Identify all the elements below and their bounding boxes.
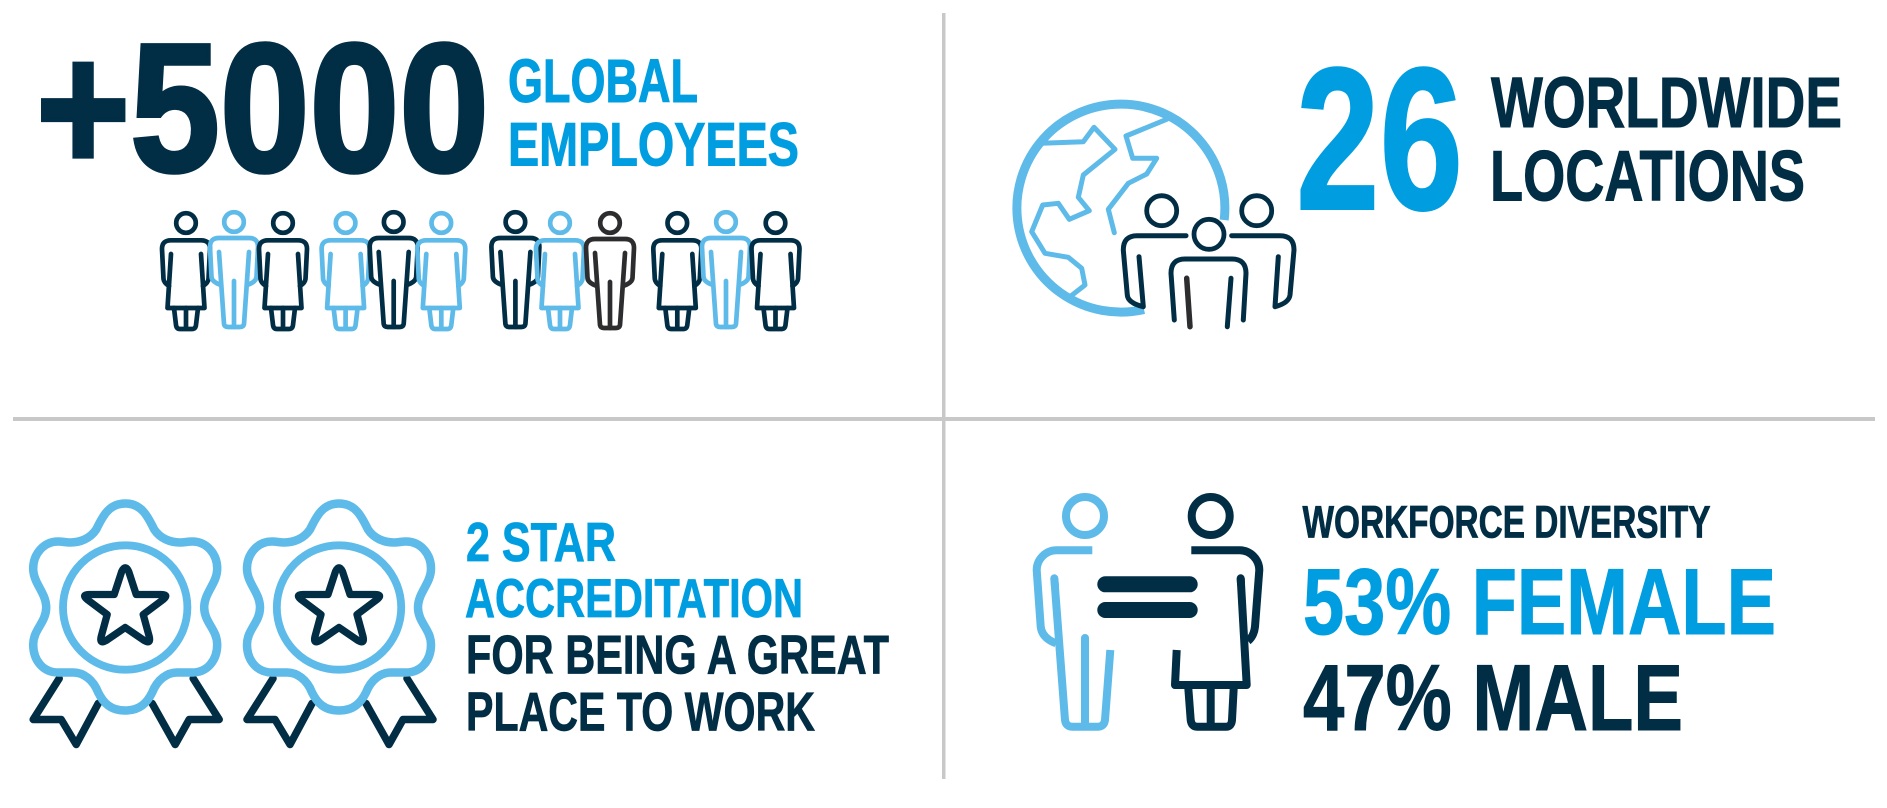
panel: worldwide locations bbox=[1017, 26, 1842, 327]
stat: 26: 26 bbox=[1296, 26, 1463, 253]
icon: row of twelve people bbox=[162, 212, 800, 329]
text: accreditation bbox=[465, 511, 889, 743]
text: accreditation: PLACE TO WORK bbox=[466, 681, 815, 743]
icon: equals sign bbox=[1097, 576, 1198, 618]
icon: globe with people bbox=[1017, 104, 1294, 327]
heading: global employees: EMPLOYEES bbox=[508, 110, 799, 178]
heading: global employees: GLOBAL bbox=[508, 47, 698, 115]
divider: vertical bbox=[942, 13, 946, 779]
text: accreditation: 2 STAR bbox=[466, 511, 616, 573]
icon: man bbox=[1037, 497, 1110, 727]
icon: award rosette right bbox=[247, 504, 433, 744]
text: workforce diversity: WORKFORCE DIVERSITY bbox=[1302, 496, 1710, 548]
divider: horizontal bbox=[13, 417, 1875, 421]
text: accreditation: ACCREDITATION bbox=[465, 567, 803, 629]
icon: woman bbox=[1175, 497, 1259, 727]
stat: 53% female: 53% FEMALE bbox=[1303, 549, 1776, 654]
heading: worldwide locations bbox=[1490, 64, 1842, 216]
heading: global employees bbox=[508, 47, 799, 178]
panel: accreditation bbox=[33, 504, 889, 744]
panel: workforce diversity bbox=[1037, 496, 1776, 750]
icon: award rosette left bbox=[33, 504, 219, 744]
stat: +5000: +5000 bbox=[36, 5, 489, 210]
text: accreditation: FOR BEING A GREAT bbox=[466, 623, 889, 685]
stat: 47% male: 47% MALE bbox=[1303, 645, 1683, 750]
panel: global employees bbox=[36, 5, 800, 329]
